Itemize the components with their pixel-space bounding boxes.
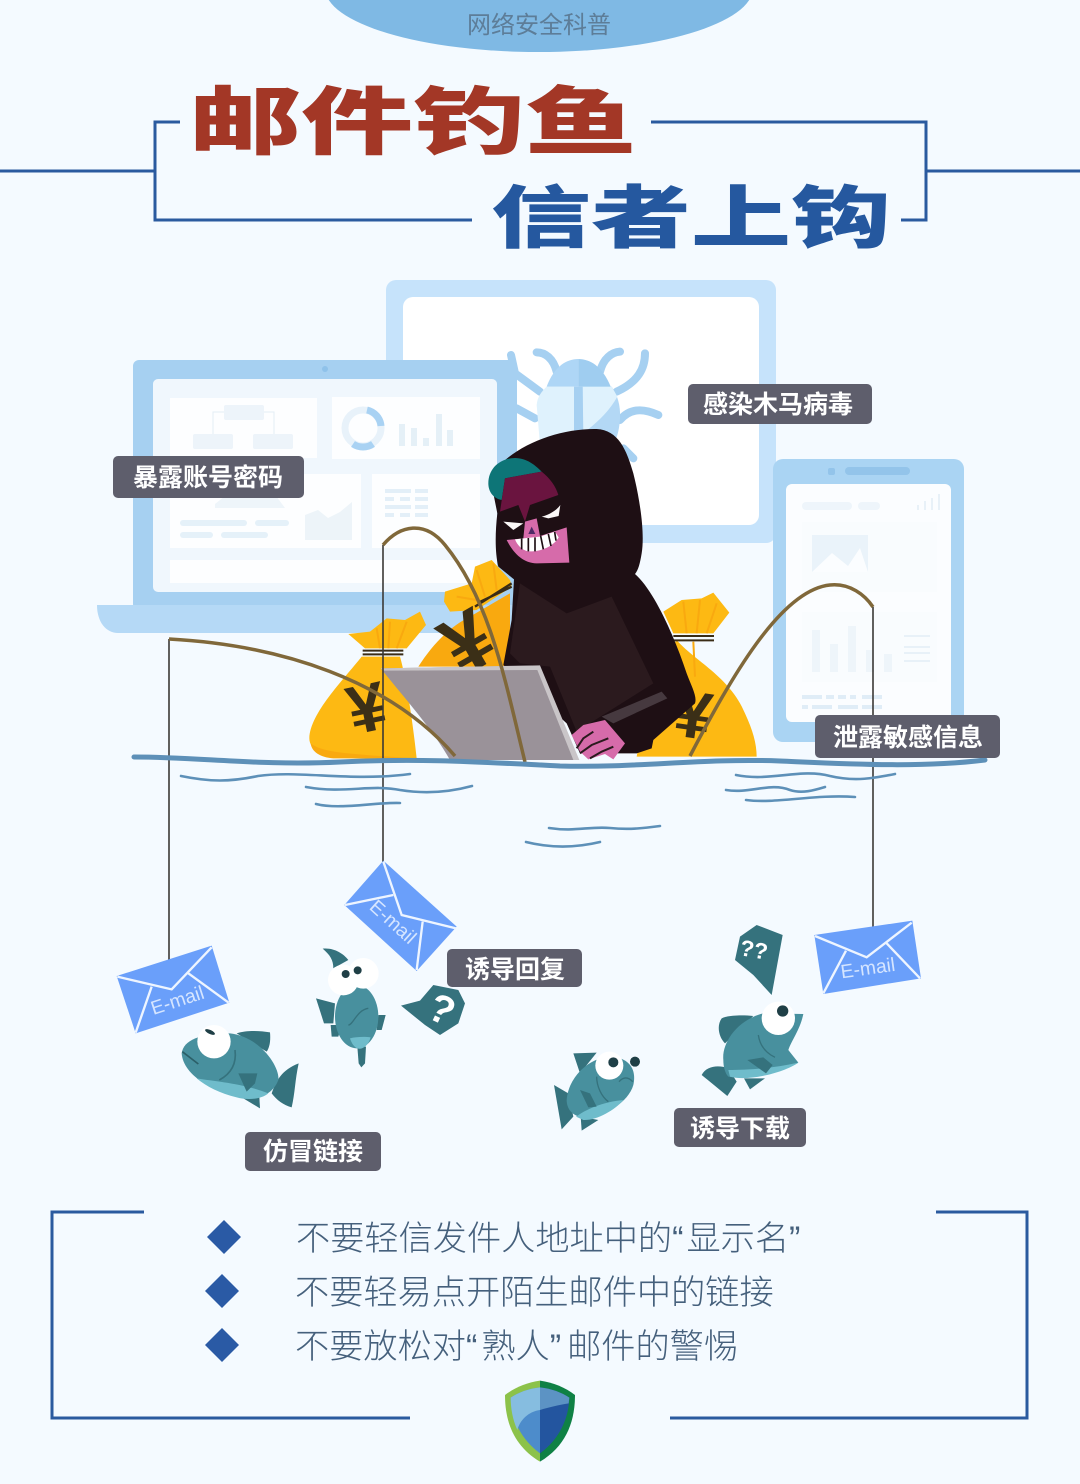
label: 仿冒链接 xyxy=(245,1132,381,1171)
shield logo xyxy=(505,1381,575,1462)
sleeve xyxy=(602,692,667,723)
fish: lower center xyxy=(554,1052,640,1131)
label: 暴露账号密码 xyxy=(113,456,304,498)
money bag: left: ¥ xyxy=(340,667,393,750)
envelope: E-mail right xyxy=(814,921,921,994)
laptop xyxy=(97,360,545,633)
tip 3: 不要放松对“熟人”邮件的警惕 xyxy=(295,1328,738,1366)
water surface xyxy=(134,757,985,846)
label: 诱导回复: 诱导回复 xyxy=(465,956,565,984)
fingers xyxy=(577,732,613,758)
hair xyxy=(488,458,542,500)
envelope: E-mail right: E-mail xyxy=(839,955,897,983)
fish: lower left xyxy=(182,1025,299,1108)
bug icon xyxy=(511,352,658,458)
hacker xyxy=(488,429,696,753)
money bag: rear: ¥ xyxy=(424,590,511,694)
title line 1: 邮件钓鱼 xyxy=(189,82,637,164)
monitor xyxy=(386,280,776,543)
header badge: 网络安全科普 xyxy=(467,12,611,39)
fish: lower right xyxy=(702,1002,803,1096)
speech bubble: question marks: ?? xyxy=(738,934,770,965)
label: 诱导下载 xyxy=(674,1108,806,1147)
money bag: left xyxy=(309,612,426,758)
title frame xyxy=(0,122,1080,220)
label: 诱导下载: 诱导下载 xyxy=(690,1115,790,1143)
fishing rods and lines xyxy=(169,528,873,960)
label: 泄露敏感信息: 泄露敏感信息 xyxy=(833,723,983,752)
nose xyxy=(528,527,535,534)
hood and body xyxy=(490,429,696,753)
tip 1: 不要轻信发件人地址中的“显示名” xyxy=(296,1220,800,1258)
speech bubble: question mark xyxy=(401,985,465,1035)
sleeve and hand xyxy=(572,692,667,759)
money bag: right: ¥ xyxy=(670,677,717,755)
envelope: E-mail left xyxy=(117,946,229,1033)
speech bubble: question mark: ? xyxy=(421,985,462,1035)
tablet xyxy=(773,459,964,742)
title line 2: 信者上钩 xyxy=(491,182,891,257)
forehead xyxy=(500,472,558,522)
label: 感染木马病毒 xyxy=(688,384,872,424)
face xyxy=(488,458,569,563)
speech bubble: question marks xyxy=(735,925,783,995)
tips frame xyxy=(52,1212,1027,1418)
fish: upper center xyxy=(316,948,386,1067)
teeth xyxy=(515,532,559,551)
envelope and fish right xyxy=(554,921,921,1131)
money bags xyxy=(309,560,757,758)
label: 感染木马病毒: 感染木马病毒 xyxy=(703,390,853,419)
lower face xyxy=(507,518,569,563)
money bag: right xyxy=(637,593,757,757)
sweater chest xyxy=(510,583,653,732)
tip 2: 不要轻易点开陌生邮件中的链接 xyxy=(295,1274,774,1312)
label: 暴露账号密码: 暴露账号密码 xyxy=(133,463,283,492)
eyes xyxy=(503,505,560,530)
envelope: E-mail left: E-mail xyxy=(148,983,207,1020)
envelope: E-mail center: E-mail xyxy=(365,896,420,949)
label: 泄露敏感信息 xyxy=(815,715,1000,758)
laptop computer xyxy=(381,665,579,760)
hand xyxy=(572,720,625,759)
label: 仿冒链接: 仿冒链接 xyxy=(263,1138,363,1166)
header badge xyxy=(325,0,753,52)
label: 诱导回复 xyxy=(447,949,582,987)
envelopes and fish left xyxy=(117,861,465,1108)
envelope: E-mail center xyxy=(344,861,457,971)
